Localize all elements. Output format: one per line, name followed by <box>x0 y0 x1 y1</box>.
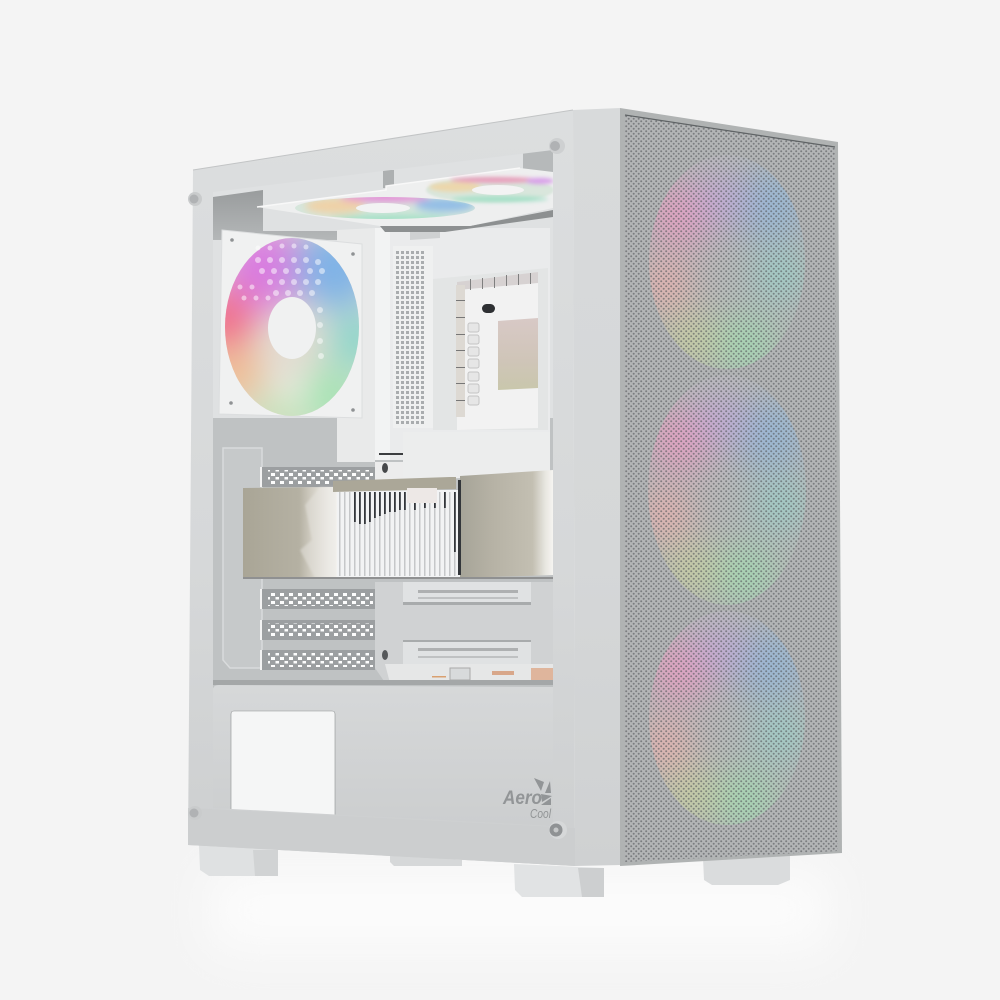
screw: bottom left <box>188 806 202 820</box>
fan corner screws <box>229 238 355 412</box>
logo word Cool: Cool <box>530 806 552 821</box>
aio connector lattice <box>410 232 440 240</box>
motherboard bottom strip <box>385 664 553 680</box>
floor highlight <box>210 870 830 950</box>
plate underside shadow <box>380 210 553 232</box>
screw: top right <box>549 138 565 154</box>
dark corner top right <box>523 150 553 172</box>
fan perforation glints <box>238 244 325 359</box>
screw: bottom right <box>549 821 567 839</box>
left fan <box>220 230 362 418</box>
black sensor <box>482 304 495 313</box>
foot: rear right <box>703 854 790 885</box>
logo <box>502 778 552 821</box>
foot: front left <box>199 845 278 876</box>
foot: center <box>390 855 462 866</box>
gpu <box>243 470 553 579</box>
gpu base line <box>243 577 553 579</box>
rear io plate <box>223 448 262 668</box>
pci slot 3 <box>260 620 375 640</box>
lower frame rail <box>188 808 575 866</box>
front fan 1 <box>637 150 815 377</box>
window interior <box>213 150 553 814</box>
front fan 2 <box>637 370 815 610</box>
lower back wall <box>213 418 553 688</box>
pci slot top <box>260 467 375 487</box>
mesh top edge shadow <box>625 115 835 147</box>
gpu left metal plate <box>243 487 337 578</box>
upper interior wall <box>213 150 553 420</box>
pci slot 4 <box>260 650 375 670</box>
aio block and bracket <box>337 228 550 480</box>
dark rear corner <box>213 190 340 240</box>
infographic: PC case product image <box>188 108 842 897</box>
top fan 1 hub <box>356 203 410 213</box>
side panel frame <box>188 110 575 866</box>
vrm row <box>457 272 538 290</box>
psu window <box>231 711 335 815</box>
bracket screw hole lower <box>382 650 388 660</box>
pcie slot upper <box>403 582 531 605</box>
motherboard lower white tray <box>456 478 458 479</box>
gpu right metal plate <box>460 470 553 578</box>
top fan 2 glow <box>426 177 554 202</box>
pcie slot lower <box>403 640 531 664</box>
gpu heat sink <box>337 490 460 578</box>
colored components <box>432 668 553 680</box>
logo word Aero: Aero <box>502 788 542 809</box>
top centre bracket shadow <box>383 170 394 188</box>
logo icon <box>534 778 552 805</box>
cpu socket <box>498 318 538 390</box>
motherboard cutout <box>456 272 538 417</box>
capacitors column <box>468 323 479 405</box>
dark base line <box>213 680 553 685</box>
fan rainbow <box>225 238 359 416</box>
gpu top bar <box>333 477 456 492</box>
foot: front right <box>514 864 604 897</box>
gpu reflection <box>300 487 337 578</box>
mesh panel <box>625 115 838 862</box>
front fan 3 <box>637 605 815 832</box>
psu shroud <box>214 685 553 688</box>
heat sink dark top <box>354 480 461 575</box>
mesh perforation <box>625 115 838 862</box>
vrm column <box>456 285 465 417</box>
top edge of frame <box>193 110 573 170</box>
pci slot 2 <box>260 589 375 609</box>
screw: top left <box>188 192 202 206</box>
top fan 1 glow <box>295 197 475 219</box>
top plate fans <box>257 168 554 226</box>
gpu power connector <box>407 488 437 503</box>
front pillar <box>573 108 620 866</box>
fan hub <box>268 297 316 359</box>
cooler grill <box>396 251 424 424</box>
front panel frame <box>620 108 842 866</box>
motherboard lower section <box>375 582 553 684</box>
heat sink fins <box>339 492 456 576</box>
